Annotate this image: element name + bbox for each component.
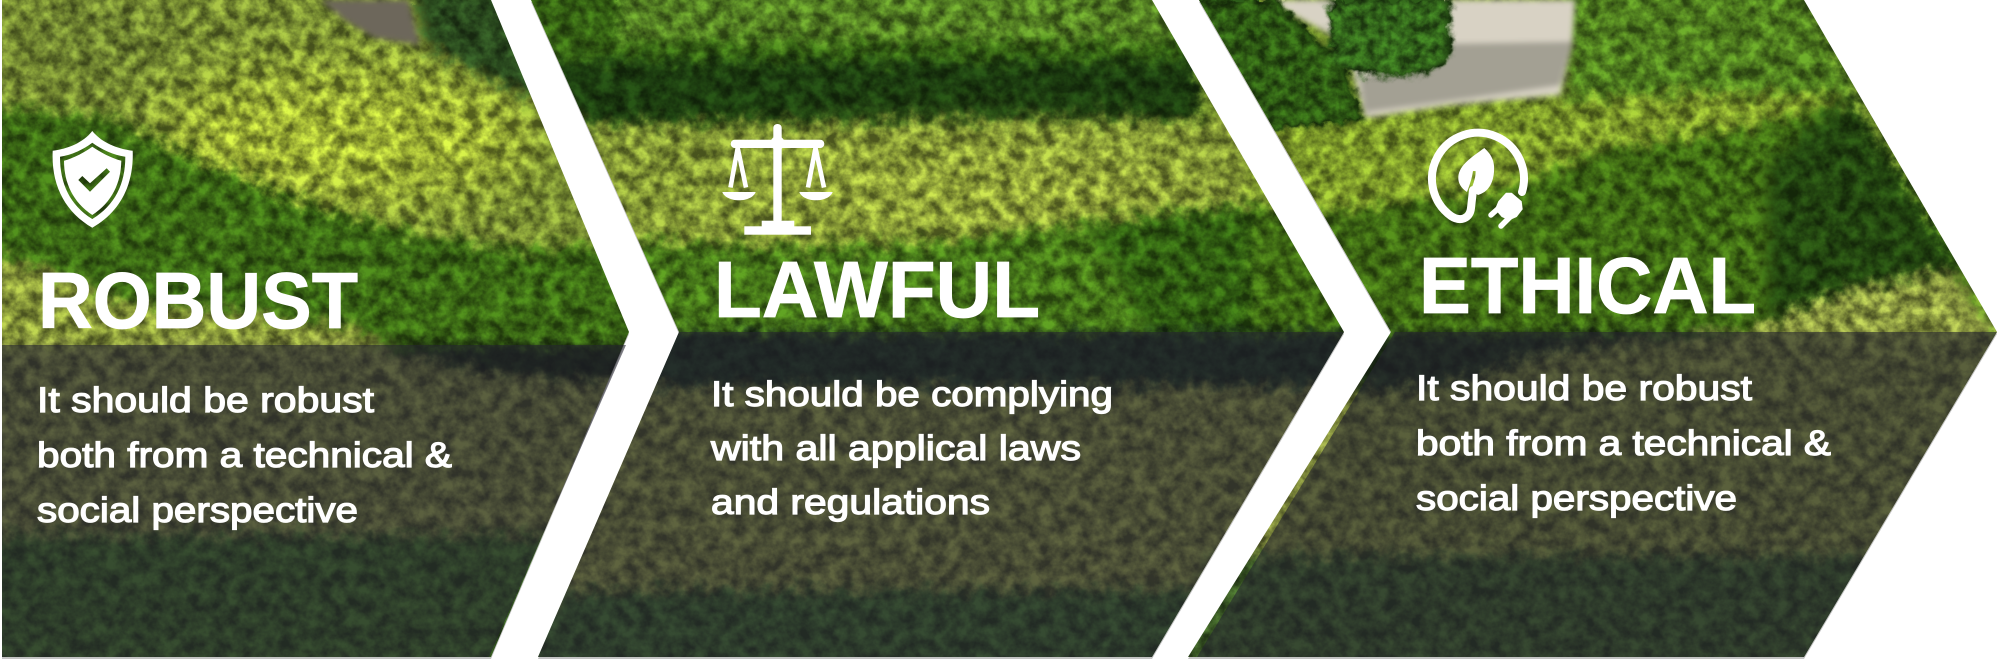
heading: robust: ROBUST: [38, 256, 358, 345]
body text: ethical: both from a technical &: [1416, 424, 1831, 463]
body text: lawful: and regulations: [711, 483, 990, 522]
panel: robust: [2, 131, 626, 657]
body text: robust: social perspective: [37, 491, 358, 530]
body text: lawful: [710, 375, 1113, 522]
dark text band: [538, 332, 1344, 657]
icon: scales of justice: [722, 124, 833, 235]
icon: leaf with plug: [1432, 133, 1524, 226]
body text: robust: both from a technical &: [37, 436, 452, 475]
body text: lawful: with all applical laws: [710, 429, 1081, 468]
body text: ethical: It should be robust: [1416, 369, 1752, 408]
body text: ethical: social perspective: [1416, 479, 1737, 518]
gravel paths: [320, 0, 1575, 118]
panel: ethical: [1197, 133, 1997, 657]
icon: shield with check: [53, 131, 133, 228]
body text: robust: [37, 381, 452, 530]
body text: robust: It should be robust: [37, 381, 374, 420]
panel: lawful: [538, 124, 1344, 657]
dark text band: [1197, 332, 1997, 657]
body text: lawful: It should be complying: [711, 375, 1113, 414]
topiary cage and bush: [1190, 0, 1450, 132]
dark text band: [2, 345, 626, 657]
heading: ethical: ETHICAL: [1419, 241, 1756, 330]
heading: lawful: LAWFUL: [714, 245, 1040, 334]
body text: ethical: [1416, 369, 1831, 518]
